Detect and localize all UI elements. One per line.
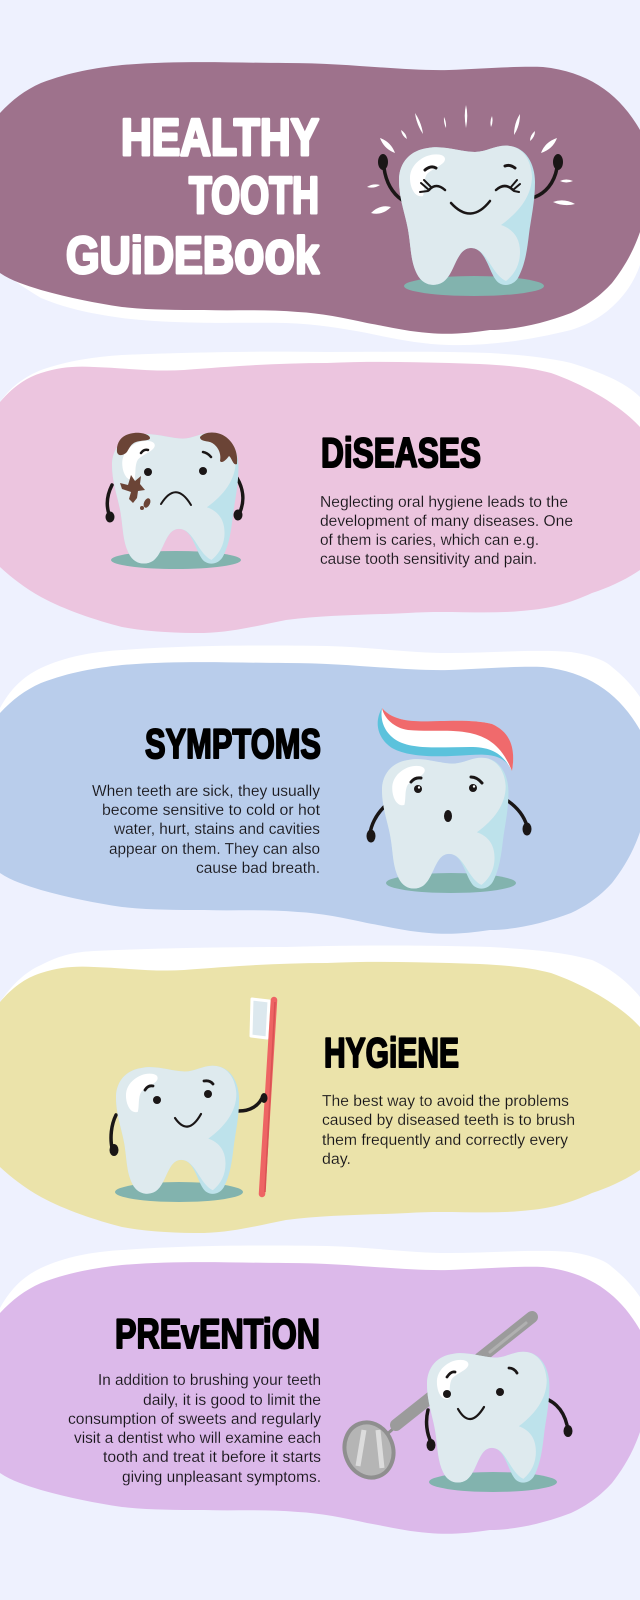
panel: hygiene [0, 946, 640, 1233]
text: diseases body: cause tooth sensitivity and pain. [320, 551, 537, 568]
text: prevention body [68, 1372, 321, 1486]
text: symptoms body: When teeth are sick, they usually [92, 783, 320, 800]
icon: surprised tooth with toothpaste [366, 708, 532, 893]
text: symptoms body: become sensitive to cold or hot [102, 802, 321, 819]
text: symptoms body: appear on them. They can also [109, 841, 320, 858]
heading: title: GUiDEBook [66, 219, 319, 286]
text: hygiene body [322, 1093, 575, 1168]
text: hygiene body: them frequently and correctly every [322, 1132, 568, 1149]
text: symptoms body: water, hurt, stains and cavities [113, 821, 320, 838]
text: prevention body: giving unpleasant symptoms. [122, 1469, 321, 1486]
text: prevention body: consumption of sweets and regularly [68, 1411, 321, 1428]
text: diseases body: development of many diseases. One [320, 513, 573, 530]
panel: prevention [0, 1245, 640, 1534]
text: prevention body: In addition to brushing your teeth [98, 1372, 321, 1389]
text: prevention body: daily, it is good to limit the [143, 1392, 321, 1409]
heading: title: TOOTH [189, 167, 319, 225]
text: symptoms body: cause bad breath. [196, 860, 320, 877]
panel: diseases [0, 352, 640, 633]
panel: title banner [0, 62, 640, 345]
heading: title: HEALTHY [121, 109, 319, 167]
text: hygiene body: day. [322, 1151, 351, 1168]
icon: tooth with toothbrush [110, 999, 275, 1202]
text: symptoms body [92, 783, 321, 877]
panel: symptoms [0, 645, 640, 934]
text: hygiene body: caused by diseased teeth is to brush [322, 1112, 575, 1129]
heading: title [66, 109, 319, 286]
heading: symptoms: SYMPTOMS [145, 720, 321, 767]
icon: happy tooth [367, 105, 575, 296]
text: prevention body: tooth and treat it before it starts [103, 1449, 321, 1466]
text: diseases body: Neglecting oral hygiene leads to the [320, 494, 568, 511]
heading: hygiene: HYGiENE [324, 1029, 459, 1076]
text: diseases body [320, 494, 573, 568]
text: diseases body: of them is caries, which can e.g. [320, 532, 539, 549]
heading: prevention: PREvENTiON [115, 1310, 320, 1357]
icon: tooth with dental mirror [337, 1317, 572, 1492]
text: prevention body: visit a dentist who will examine each [74, 1430, 321, 1447]
icon: decayed tooth [106, 432, 243, 569]
heading: diseases: DiSEASES [321, 429, 481, 476]
text: hygiene body: The best way to avoid the problems [322, 1093, 569, 1110]
